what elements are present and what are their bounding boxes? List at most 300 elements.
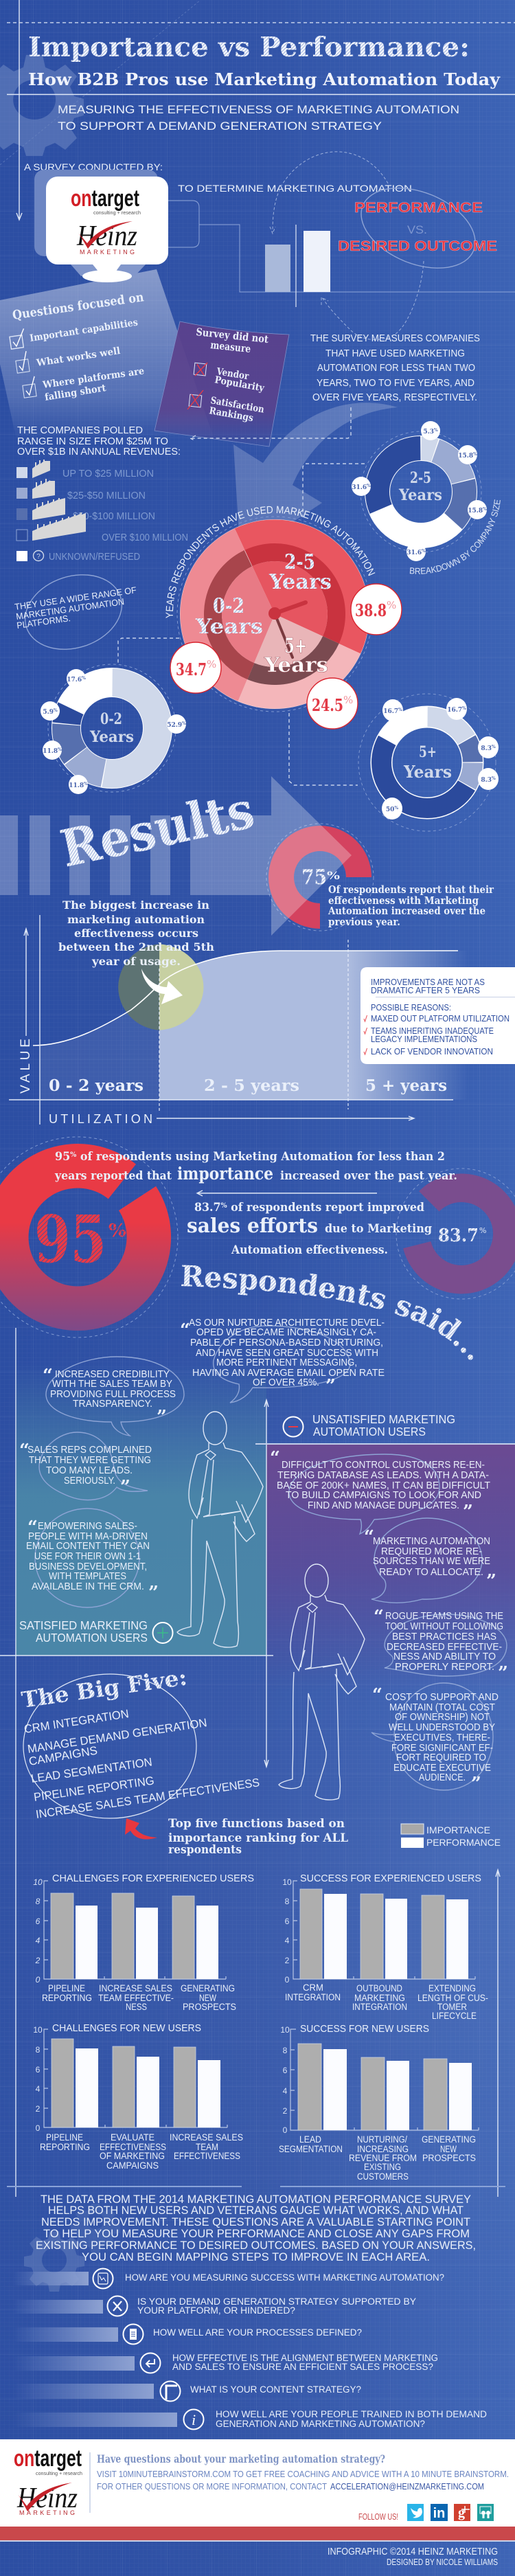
question 2: YOUR PLATFORM, OR HINDERED? — [137, 2305, 295, 2316]
axis numbers: 0 — [36, 2123, 41, 2133]
text block: survey measures: OVER FIVE YEARS, RESPECTIVELY. — [312, 392, 477, 403]
percent bubbles: % — [483, 507, 487, 512]
legend row: over 100 million: OVER $100 MILLION — [102, 532, 188, 543]
question 5: WHAT IS YOUR CONTENT STRATEGY? — [190, 2384, 361, 2395]
quote: empowering salespeople: BUSINESS DEVELOPMENT, — [29, 1561, 147, 1572]
text block: survey data summary: EXISTING PERFORMANCE TO DESIRED OUTCOMES. BASED ON YOUR ANSWERS, — [36, 2239, 476, 2252]
percent bubbles: 31.6 — [407, 550, 422, 556]
chart: 95 percent ring: % — [108, 1221, 126, 1241]
question 3: HOW WELL ARE YOUR PROCESSES DEFINED? — [153, 2327, 362, 2338]
axis numbers — [33, 1877, 43, 1985]
axis numbers: 0 — [36, 1975, 41, 1985]
text block: 83.7 percent statement — [187, 1201, 432, 1256]
panel: improvements not as dramatic: TEAMS INHERITING INADEQUATE — [371, 1026, 494, 1036]
axis numbers: 2 — [285, 1956, 290, 1965]
quote: cost to support: ” — [471, 1774, 481, 1794]
quote: nurture architecture: HAVING AN AVERAGE EMAIL OPEN RATE — [192, 1368, 385, 1379]
question 6 — [13, 2409, 487, 2429]
text block: 95 percent statement: % — [70, 1151, 77, 1159]
quote: empowering salespeople: ” — [148, 1583, 159, 1603]
text block: biggest increase — [58, 899, 214, 968]
donut center label — [89, 710, 134, 746]
axis numbers: 6 — [283, 2066, 288, 2075]
panel: the big five: The Big Five: — [20, 1664, 189, 1713]
quote: empowering salespeople: USE FOR THEIR OWN 1-1 — [34, 1551, 141, 1562]
category labels — [279, 2134, 476, 2182]
chart: 83.7 percent ring: 83.7 — [438, 1225, 479, 1246]
question 1: HOW ARE YOU MEASURING SUCCESS WITH MARKETING AUTOMATION? — [125, 2272, 444, 2283]
percent bubble 24.5 — [307, 678, 358, 729]
question 3 — [13, 2325, 362, 2344]
clock hands — [268, 602, 306, 657]
stat: 75 percent: 75 — [301, 866, 327, 890]
chart: 75 percent ring — [266, 824, 374, 931]
category labels — [42, 1983, 236, 2012]
category labels: INTEGRATION — [352, 2002, 407, 2012]
legend: importance and performance — [401, 1824, 501, 1848]
text block: survey data summary — [36, 2193, 476, 2263]
segment labels: Years — [195, 615, 263, 639]
percent bubbles: % — [182, 721, 186, 726]
legend row: 50-100 million — [16, 498, 155, 522]
determine text: TO DETERMINE MARKETING AUTOMATION — [178, 183, 412, 194]
axis numbers: 0 — [283, 2125, 288, 2135]
percent bubbles: % — [54, 708, 58, 713]
quote: more resources — [364, 1527, 496, 1592]
segment labels: 2-5 — [284, 550, 315, 574]
legend row: 50-100 million: $50-$100 MILLION — [73, 510, 155, 522]
icon: check box 1 — [9, 328, 26, 349]
quote: cost to support: EDUCATE EXECUTIVE — [393, 1763, 491, 1774]
panel: improvements not as dramatic — [360, 967, 515, 1064]
title — [28, 32, 501, 89]
heading: unsatisfied users: UNSATISFIED MARKETING — [312, 1412, 455, 1426]
chart: value vs utilization curve — [9, 915, 468, 1126]
callout: performance vs desired outcome: DESIRED OUTCOME — [338, 238, 497, 254]
percent bubbles: % — [84, 782, 88, 787]
callout: wide range of platforms — [14, 563, 137, 662]
quote: cost to support: EXECUTIVES, THERE- — [394, 1732, 490, 1743]
icon: twitter — [407, 2504, 424, 2521]
bars — [300, 1889, 468, 1979]
chart: 2-5 years donut — [352, 421, 501, 574]
donut center label: 2-5 — [410, 469, 431, 487]
quote: sales reps complained: SALES REPS COMPLAINED — [27, 1445, 152, 1456]
stat: 75 percent: % — [327, 869, 340, 882]
heading: satisfied users: AUTOMATION USERS — [36, 1631, 148, 1645]
axis numbers: 6 — [285, 1917, 290, 1926]
quote: more resources: REQUIRED MORE RE- — [381, 1546, 482, 1557]
icon: info: i — [192, 2411, 196, 2428]
percent bubbles — [352, 421, 487, 561]
paper sheet: questions focused on — [0, 269, 214, 440]
frame lines and arrows — [0, 1328, 515, 2197]
panel: the big five: MANAGE DEMAND GENERATION — [27, 1716, 208, 1756]
axis numbers: 2 — [35, 1956, 41, 1965]
quote: sales reps complained: ” — [120, 1477, 130, 1498]
quote: increased credibility — [43, 1366, 176, 1427]
area under curve — [40, 951, 468, 1100]
panel: survey did not measure: Vendor — [216, 366, 250, 382]
panel: survey did not measure: Popularity — [214, 374, 266, 394]
dashed arc arrows — [270, 152, 424, 339]
chart: overall years of use: YEARS RESPONDENTS HAVE USED MARKETING AUTOMATION — [166, 506, 375, 618]
text block: survey data summary: HELPS BOTH NEW USERS AND VETERANS GAUGE WHAT WORKS, AND WHAT — [48, 2204, 464, 2217]
text block: 83.7 percent statement: of respondents report improved — [227, 1201, 424, 1214]
category labels: GENERATING — [181, 1983, 235, 1993]
percent bubbles: 50 — [386, 806, 394, 813]
bar chart: challenges for experienced users: CHALLENGES FOR EXPERIENCED USERS — [52, 1873, 254, 1884]
category labels: EVALUATE — [111, 2132, 154, 2143]
legend: importance and performance: PERFORMANCE — [426, 1837, 501, 1848]
percent bubble 24.5: % — [343, 694, 353, 706]
legend row: up to 25 million: UP TO $25 MILLION — [62, 468, 154, 479]
axes — [290, 2029, 479, 2130]
donut center label: Years — [403, 762, 452, 782]
category labels: PROSPECTS — [422, 2153, 476, 2163]
panel: survey did not measure: measure — [210, 339, 251, 355]
category labels: EXTENDING — [428, 1983, 476, 1993]
panel: survey did not measure — [154, 321, 289, 447]
heading: Results: Results — [56, 780, 260, 879]
icon: monitor with logos — [34, 170, 168, 282]
category labels: INTEGRATION — [285, 1992, 341, 2002]
bar chart: success for experienced users: SUCCESS FOR EXPERIENCED USERS — [300, 1873, 481, 1884]
quote: cost to support: FORE SIGNIFICANT EF- — [391, 1743, 493, 1754]
text block: survey measures: THAT HAVE USED MARKETING — [325, 348, 465, 359]
logo: Heinz Marketing: Heinz — [16, 2483, 78, 2514]
period labels: 2 - 5 years — [204, 1076, 299, 1095]
bar chart: success for experienced users — [282, 1873, 488, 2021]
bar chart: challenges for experienced users — [33, 1873, 254, 2012]
question 6: GENERATION AND MARKETING AUTOMATION? — [216, 2419, 425, 2429]
logo: ontarget: ontarget — [14, 2445, 82, 2472]
bars — [51, 1893, 218, 1979]
footer contact text — [97, 2469, 509, 2492]
text block: companies polled: RANGE IN SIZE FROM $25M TO — [17, 436, 168, 447]
text block: top five functions: respondents — [168, 1843, 242, 1856]
survey intro label: A SURVEY CONDUCTED BY: — [24, 161, 163, 172]
quote: rogue teams: “ — [374, 1607, 384, 1627]
callout: performance vs desired outcome: PERFORMANCE — [354, 200, 483, 216]
highlight ellipse — [118, 944, 203, 1030]
big translucent arrow — [233, 403, 398, 556]
icon: google plus — [454, 2504, 470, 2521]
panel: survey did not measure: Satisfaction — [209, 395, 265, 416]
percent bubbles: % — [82, 676, 86, 681]
text block: survey data summary: THE DATA FROM THE 2014 MARKETING AUTOMATION PERFORMANCE SURVEY — [41, 2193, 471, 2206]
question 1 — [13, 2268, 444, 2289]
quote: cost to support: AUDIENCE. — [419, 1772, 466, 1783]
segment labels: Years — [268, 570, 332, 594]
quote: rogue teams — [374, 1607, 508, 1684]
quote: increased credibility: “ — [43, 1366, 53, 1386]
quote: more resources: READY TO ALLOCATE. — [379, 1567, 483, 1578]
chart: 83.7 percent ring — [396, 1168, 515, 1299]
text block: biggest increase: effectiveness occurs — [74, 927, 198, 940]
category labels: PIPELINE — [48, 1983, 85, 1993]
axes — [9, 915, 453, 1125]
period labels: 5 + years — [365, 1076, 447, 1095]
subtitle: TO SUPPORT A DEMAND GENERATION STRATEGY — [58, 120, 382, 133]
logo: Heinz Marketing: MARKETING — [80, 249, 135, 256]
donut center label — [398, 469, 442, 504]
axis numbers: 8 — [36, 1897, 41, 1906]
text block: 83.7 percent statement: % — [221, 1202, 227, 1210]
title: Importance vs Performance: — [28, 32, 470, 63]
axis numbers: 10 — [280, 2025, 290, 2035]
heading: unsatisfied users — [283, 1412, 455, 1438]
callout: wide range of platforms: MARKETING AUTOMATION — [15, 596, 125, 622]
quote: sales reps complained — [19, 1440, 152, 1498]
category labels: NEW — [199, 1993, 216, 2003]
axis numbers: 4 — [36, 1936, 41, 1945]
category labels: LENGTH OF CUS- — [417, 1993, 488, 2003]
quote: sales reps complained: “ — [19, 1440, 30, 1461]
axis numbers: 2 — [36, 2104, 41, 2114]
text block: 95 percent statement: 95 — [55, 1150, 71, 1163]
text block: biggest increase: year of usage. — [91, 955, 181, 968]
quote: more resources: “ — [364, 1527, 374, 1548]
stat: 75 percent: previous year. — [328, 916, 400, 928]
logo: ontarget: ontarget — [71, 185, 139, 212]
quote: cost to support: OF OWNERSHIP) NOT — [395, 1712, 490, 1723]
question 5 — [13, 2381, 361, 2402]
quote: nurture architecture: AS OUR NURTURE ARCHITECTURE DEVEL- — [189, 1318, 385, 1329]
axis numbers: 6 — [36, 1917, 41, 1926]
quote: customers re-entering: DIFFICULT TO CONTROL CUSTOMERS RE-EN- — [282, 1460, 485, 1471]
percent bubbles: 5.3 — [423, 429, 434, 436]
icon: circular arrow — [140, 2353, 161, 2373]
legend row: 25-50 million: $25-$50 MILLION — [67, 490, 146, 501]
axis numbers: 2 — [283, 2106, 288, 2116]
percent bubble 34.7 — [170, 642, 221, 693]
axis numbers — [280, 2025, 290, 2135]
question 4: HOW EFFECTIVE IS THE ALIGNMENT BETWEEN MARKETING — [172, 2353, 438, 2363]
category labels: LEAD — [299, 2134, 321, 2145]
percent bubbles: 16.7 — [383, 708, 398, 715]
arrow: curved white — [141, 969, 183, 1004]
icon: info — [184, 2410, 203, 2429]
axis numbers: 0 — [285, 1975, 290, 1985]
category labels: NEW — [440, 2144, 457, 2154]
text block: 83.7 percent statement: due to Marketing — [325, 1222, 432, 1236]
quote: cost to support: “ — [372, 1685, 382, 1706]
paper sheet: questions focused on: Questions focused on — [12, 290, 145, 323]
category labels — [285, 1982, 488, 2021]
quote: customers re-entering: TO BUILD CAMPAIGNS TO LOOK FOR AND — [286, 1490, 481, 1501]
percent bubbles: 11.8 — [43, 748, 58, 755]
category labels — [40, 2132, 243, 2171]
text block: survey measures: THE SURVEY MEASURES COMPANIES — [310, 333, 480, 344]
icon: man, unsatisfied — [279, 1564, 365, 1800]
quote: rogue teams: NESS AND ABILITY TO — [393, 1651, 496, 1662]
stat: 75 percent: effectiveness with Marketing — [328, 895, 479, 907]
icon: background gear — [0, 55, 84, 156]
text block: top five functions: Top five functions based on — [168, 1817, 345, 1830]
icon: crossed box satisfaction — [187, 390, 203, 409]
percent bubbles: 5.9 — [43, 709, 54, 716]
bar chart: success for new users — [279, 2024, 479, 2182]
percent bubbles: % — [462, 706, 466, 711]
percent bubbles: % — [422, 549, 426, 554]
percent bubbles: % — [473, 452, 477, 457]
callout: wide range of platforms: PLATFORMS. — [16, 613, 71, 631]
chart: 2-5 years donut: BREAKDOWN BY COMPANY SIZE — [409, 499, 501, 574]
chart: 95 percent ring: 95 — [34, 1201, 106, 1278]
category labels: INCREASE SALES — [99, 1983, 172, 1993]
quote: rogue teams: BEST PRACTICES HAS — [392, 1631, 496, 1642]
icon: check box 2 — [14, 351, 30, 373]
legend row: unknown: UNKNOWN/REFUSED — [49, 551, 140, 563]
axis numbers: 6 — [36, 2065, 41, 2075]
quote: rogue teams: ” — [498, 1663, 508, 1684]
quote: increased credibility: INCREASED CREDIBILITY — [55, 1369, 170, 1380]
heading: unsatisfied users: AUTOMATION USERS — [313, 1425, 426, 1438]
percent bubbles: 11.8 — [69, 782, 84, 789]
text block: companies polled — [17, 425, 181, 457]
paper sheet: questions focused on: Important capabilities — [29, 317, 139, 344]
quote: empowering salespeople: WITH TEMPLATES — [49, 1571, 126, 1582]
text block: survey data summary: NEEDS IMPROVEMENT. THESE QUESTIONS ARE A VALUABLE STARTING POINT — [41, 2216, 470, 2228]
percent bubbles: 8.3 — [481, 777, 492, 784]
subtitle — [58, 104, 459, 133]
question 4: AND SALES TO ENSURE AN EFFICIENT SALES PROCESS? — [172, 2362, 433, 2372]
percent bubble 38.8 — [351, 584, 402, 635]
text block: 83.7 percent statement: Automation effectiveness. — [231, 1243, 388, 1256]
footer contact text: ACCELERATION@HEINZMARKETING.COM — [330, 2481, 484, 2492]
quote: nurture architecture: PABLE OF PERSONA-BASED NURTURING, — [190, 1337, 383, 1348]
quote: cost to support: MAINTAIN (TOTAL COST — [389, 1702, 495, 1713]
quote: nurture architecture — [180, 1318, 385, 1397]
quote: customers re-entering: “ — [270, 1448, 280, 1469]
category labels: CRM — [303, 1982, 323, 1993]
chart: 95 percent ring — [0, 1137, 178, 1337]
quote: customers re-entering: FIND AND MANAGE DUPLICATES. — [308, 1500, 459, 1511]
chart: 5+ years donut — [358, 694, 499, 831]
credits — [328, 2546, 498, 2567]
category labels: TEAM — [196, 2142, 218, 2152]
paper sheet: questions focused on: Where platforms are — [41, 365, 145, 391]
heading: satisfied users — [19, 1618, 173, 1645]
percent bubble 34.7: 34.7 — [176, 659, 207, 679]
text block: 83.7 percent statement: 83.7 — [194, 1201, 222, 1214]
segment labels: 5+ — [284, 634, 307, 658]
category labels: PIPELINE — [46, 2132, 83, 2143]
axis numbers: 4 — [285, 1936, 290, 1945]
category labels: SEGMENTATION — [279, 2144, 343, 2154]
chart: overall years of use — [166, 506, 402, 730]
quote: customers re-entering: BASE OF 200K+ NAMES, IT CAN BE DIFFICULT — [277, 1480, 490, 1491]
footer heading: Have questions about your marketing automation strategy? — [97, 2452, 385, 2465]
panel: improvements not as dramatic: LEGACY IMPLEMENTATIONS — [371, 1035, 477, 1044]
panel: the big five: INCREASE SALES TEAM EFFECTIVENESS — [35, 1776, 260, 1821]
quote: empowering salespeople: EMAIL CONTENT THEY CAN — [26, 1541, 150, 1552]
category labels: GENERATING — [422, 2134, 476, 2145]
quote: nurture architecture: OPED WE BECAME INCREASINGLY CA- — [196, 1327, 376, 1338]
panel: the big five: PIPELINE REPORTING — [33, 1774, 155, 1804]
text block: survey data summary: TO HELP YOU MEASURE YOUR PERFORMANCE AND CLOSE ANY GAPS FROM — [43, 2228, 470, 2240]
category labels: INCREASE SALES — [170, 2132, 243, 2143]
logo: ontarget: consulting + research — [93, 211, 141, 216]
panel: footer — [0, 2439, 515, 2527]
quote: empowering salespeople: EMPOWERING SALES- — [38, 1521, 137, 1532]
bar chart: success for new users: SUCCESS FOR NEW USERS — [300, 2024, 429, 2035]
icon: ruler — [161, 2381, 180, 2402]
category labels: PROSPECTS — [183, 2002, 236, 2012]
text block: survey measures: YEARS, TWO TO FIVE YEARS, AND — [317, 378, 474, 389]
icon: crossed box vendor — [194, 363, 207, 376]
arrow: left margin — [16, 0, 22, 220]
percent bubbles: 8.3 — [481, 745, 492, 752]
axes — [44, 2029, 227, 2127]
category labels: NURTURING/ — [357, 2134, 407, 2145]
percent bubbles: % — [492, 745, 496, 749]
quote: nurture architecture: OF OVER 45%. — [253, 1377, 319, 1388]
chart: 0-2 years donut — [41, 664, 186, 794]
icon: linkedin: in — [433, 2506, 445, 2521]
percent bubbles: % — [58, 747, 62, 752]
icon: chart — [93, 2268, 113, 2289]
curve — [33, 951, 458, 1046]
bars — [298, 2044, 472, 2130]
text block: 95 percent statement: of respondents using Marketing Automation for less than 2 — [76, 1150, 445, 1163]
text block: 95 percent statement: years reported that — [54, 1169, 172, 1182]
panel: satisfied users — [16, 1364, 266, 1656]
segment labels: Years — [264, 653, 328, 677]
text block: biggest increase: The biggest increase in — [62, 899, 209, 912]
legend row: over 100 million — [16, 512, 188, 543]
category labels: EFFECTIVENESS — [174, 2151, 240, 2161]
quote: increased credibility: TRANSPARENCY. — [73, 1399, 152, 1410]
quote: cost to support — [372, 1685, 499, 1794]
icon: man, satisfied — [177, 1412, 263, 1647]
panel: unsatisfied users — [266, 1444, 515, 1691]
dashed connectors — [118, 407, 365, 785]
axes — [293, 1881, 475, 1979]
quote: sales reps complained: THAT THEY WERE GETTING — [29, 1455, 151, 1466]
text block: top five functions — [168, 1817, 348, 1856]
percent bubbles: % — [394, 806, 398, 811]
donut center label: 5+ — [419, 743, 437, 761]
callout: performance vs desired outcome — [338, 172, 497, 284]
arrow: red curved — [125, 1818, 157, 1840]
quote: cost to support: WELL UNDERSTOOD BY — [389, 1722, 495, 1733]
percent bubbles: % — [398, 708, 402, 712]
percent bubbles: 16.7 — [447, 707, 462, 714]
quote: nurture architecture: ” — [325, 1376, 336, 1397]
text block: survey measures — [310, 333, 480, 403]
icon: google plus: g — [458, 2505, 465, 2520]
logo: ontarget: consulting + research — [36, 2472, 82, 2476]
legend row: 25-50 million — [16, 479, 146, 501]
paper sheet: questions focused on: What works well — [35, 346, 121, 369]
axis numbers — [33, 2025, 43, 2133]
top dashed rule — [7, 22, 515, 23]
legend row: unknown: ? — [36, 553, 41, 561]
text block: 95 percent statement: increased over the past year. — [280, 1169, 457, 1182]
title: How B2B Pros use Marketing Automation Today — [28, 69, 501, 89]
bar chart: challenges for new users — [33, 2023, 243, 2171]
axis label: utilization: UTILIZATION — [49, 1112, 152, 1126]
axis numbers: 8 — [285, 1897, 290, 1906]
logo: Heinz Marketing: MARKETING — [19, 2509, 75, 2516]
icon: slideshare — [477, 2504, 494, 2521]
percent bubbles: 52.9 — [167, 722, 182, 729]
axis numbers: 10 — [33, 2025, 43, 2035]
text block: biggest increase: between the 2nd and 5th — [58, 940, 214, 953]
quote: rogue teams: ROGUE TEAMS USING THE — [385, 1611, 503, 1622]
